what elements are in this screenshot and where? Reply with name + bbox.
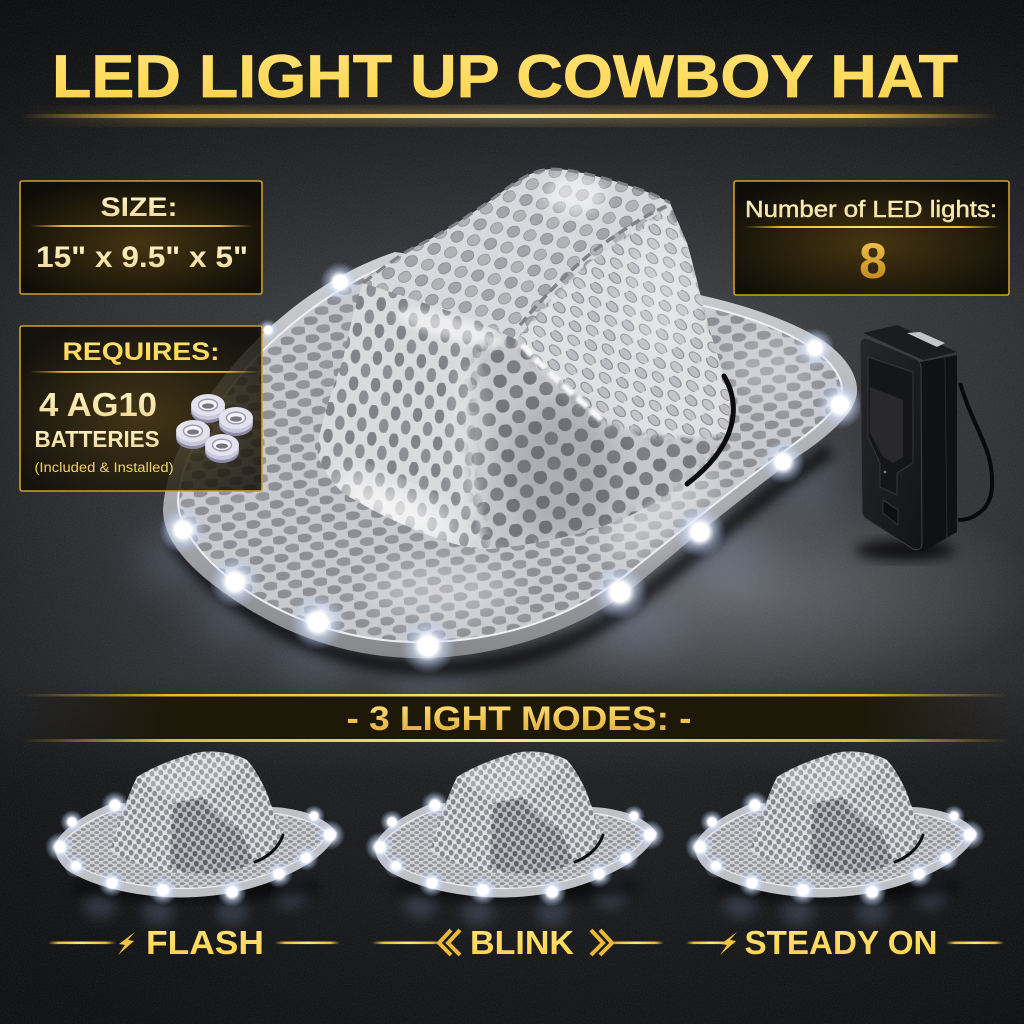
mode label: steady on: [686, 924, 1004, 961]
crown right facet: [518, 211, 730, 441]
battery count: 4 AG10: [39, 386, 157, 423]
LED count label: Number of LED lights:: [745, 196, 997, 222]
requires label: REQUIRES:: [62, 338, 220, 366]
brim surface: [178, 262, 842, 642]
crown shading: [505, 400, 615, 540]
hat shadow: [175, 450, 830, 668]
title underline: [20, 109, 1000, 123]
crown ridge highlight: [522, 345, 605, 423]
crown edge sequins: [363, 169, 670, 283]
cable: [958, 383, 992, 520]
crown base: [317, 169, 730, 549]
included note: (Included & Installed): [34, 460, 174, 475]
mode label: flash: [48, 924, 340, 961]
title: LED LIGHT UP COWBOY HAT: [52, 43, 958, 110]
LED lights: [159, 262, 864, 674]
mode label: blink: BLINK: [470, 924, 574, 961]
size label: SIZE:: [100, 192, 178, 222]
LED count value: 8: [859, 233, 887, 289]
mode label: blink: [372, 924, 664, 961]
size value: 15" x 9.5" x 5": [36, 241, 248, 274]
hat band: [687, 376, 733, 484]
panel: batteries: [20, 326, 262, 491]
crown: [317, 168, 730, 549]
mode label: flash: FLASH: [146, 924, 264, 961]
battery pack: [855, 325, 992, 560]
batteries word: BATTERIES: [34, 426, 160, 452]
crown top panel: [363, 169, 670, 340]
light modes banner: [20, 694, 1010, 742]
panel: LED count: [734, 181, 1009, 295]
mode hat: blink: [365, 751, 665, 926]
mode label: steady on: STEADY ON: [744, 924, 938, 961]
panel: size: [20, 181, 262, 294]
floor glow under LEDs: [141, 452, 839, 700]
icon: button batteries: [176, 394, 253, 463]
brim light wash: [365, 340, 810, 618]
crown center facet: [462, 334, 726, 549]
mode hat: steady on: [685, 751, 985, 926]
mode hat: flash: [45, 751, 345, 926]
hat brim: [163, 252, 857, 658]
main hat: [141, 150, 864, 700]
banner heading: - 3 LIGHT MODES: -: [346, 700, 692, 738]
